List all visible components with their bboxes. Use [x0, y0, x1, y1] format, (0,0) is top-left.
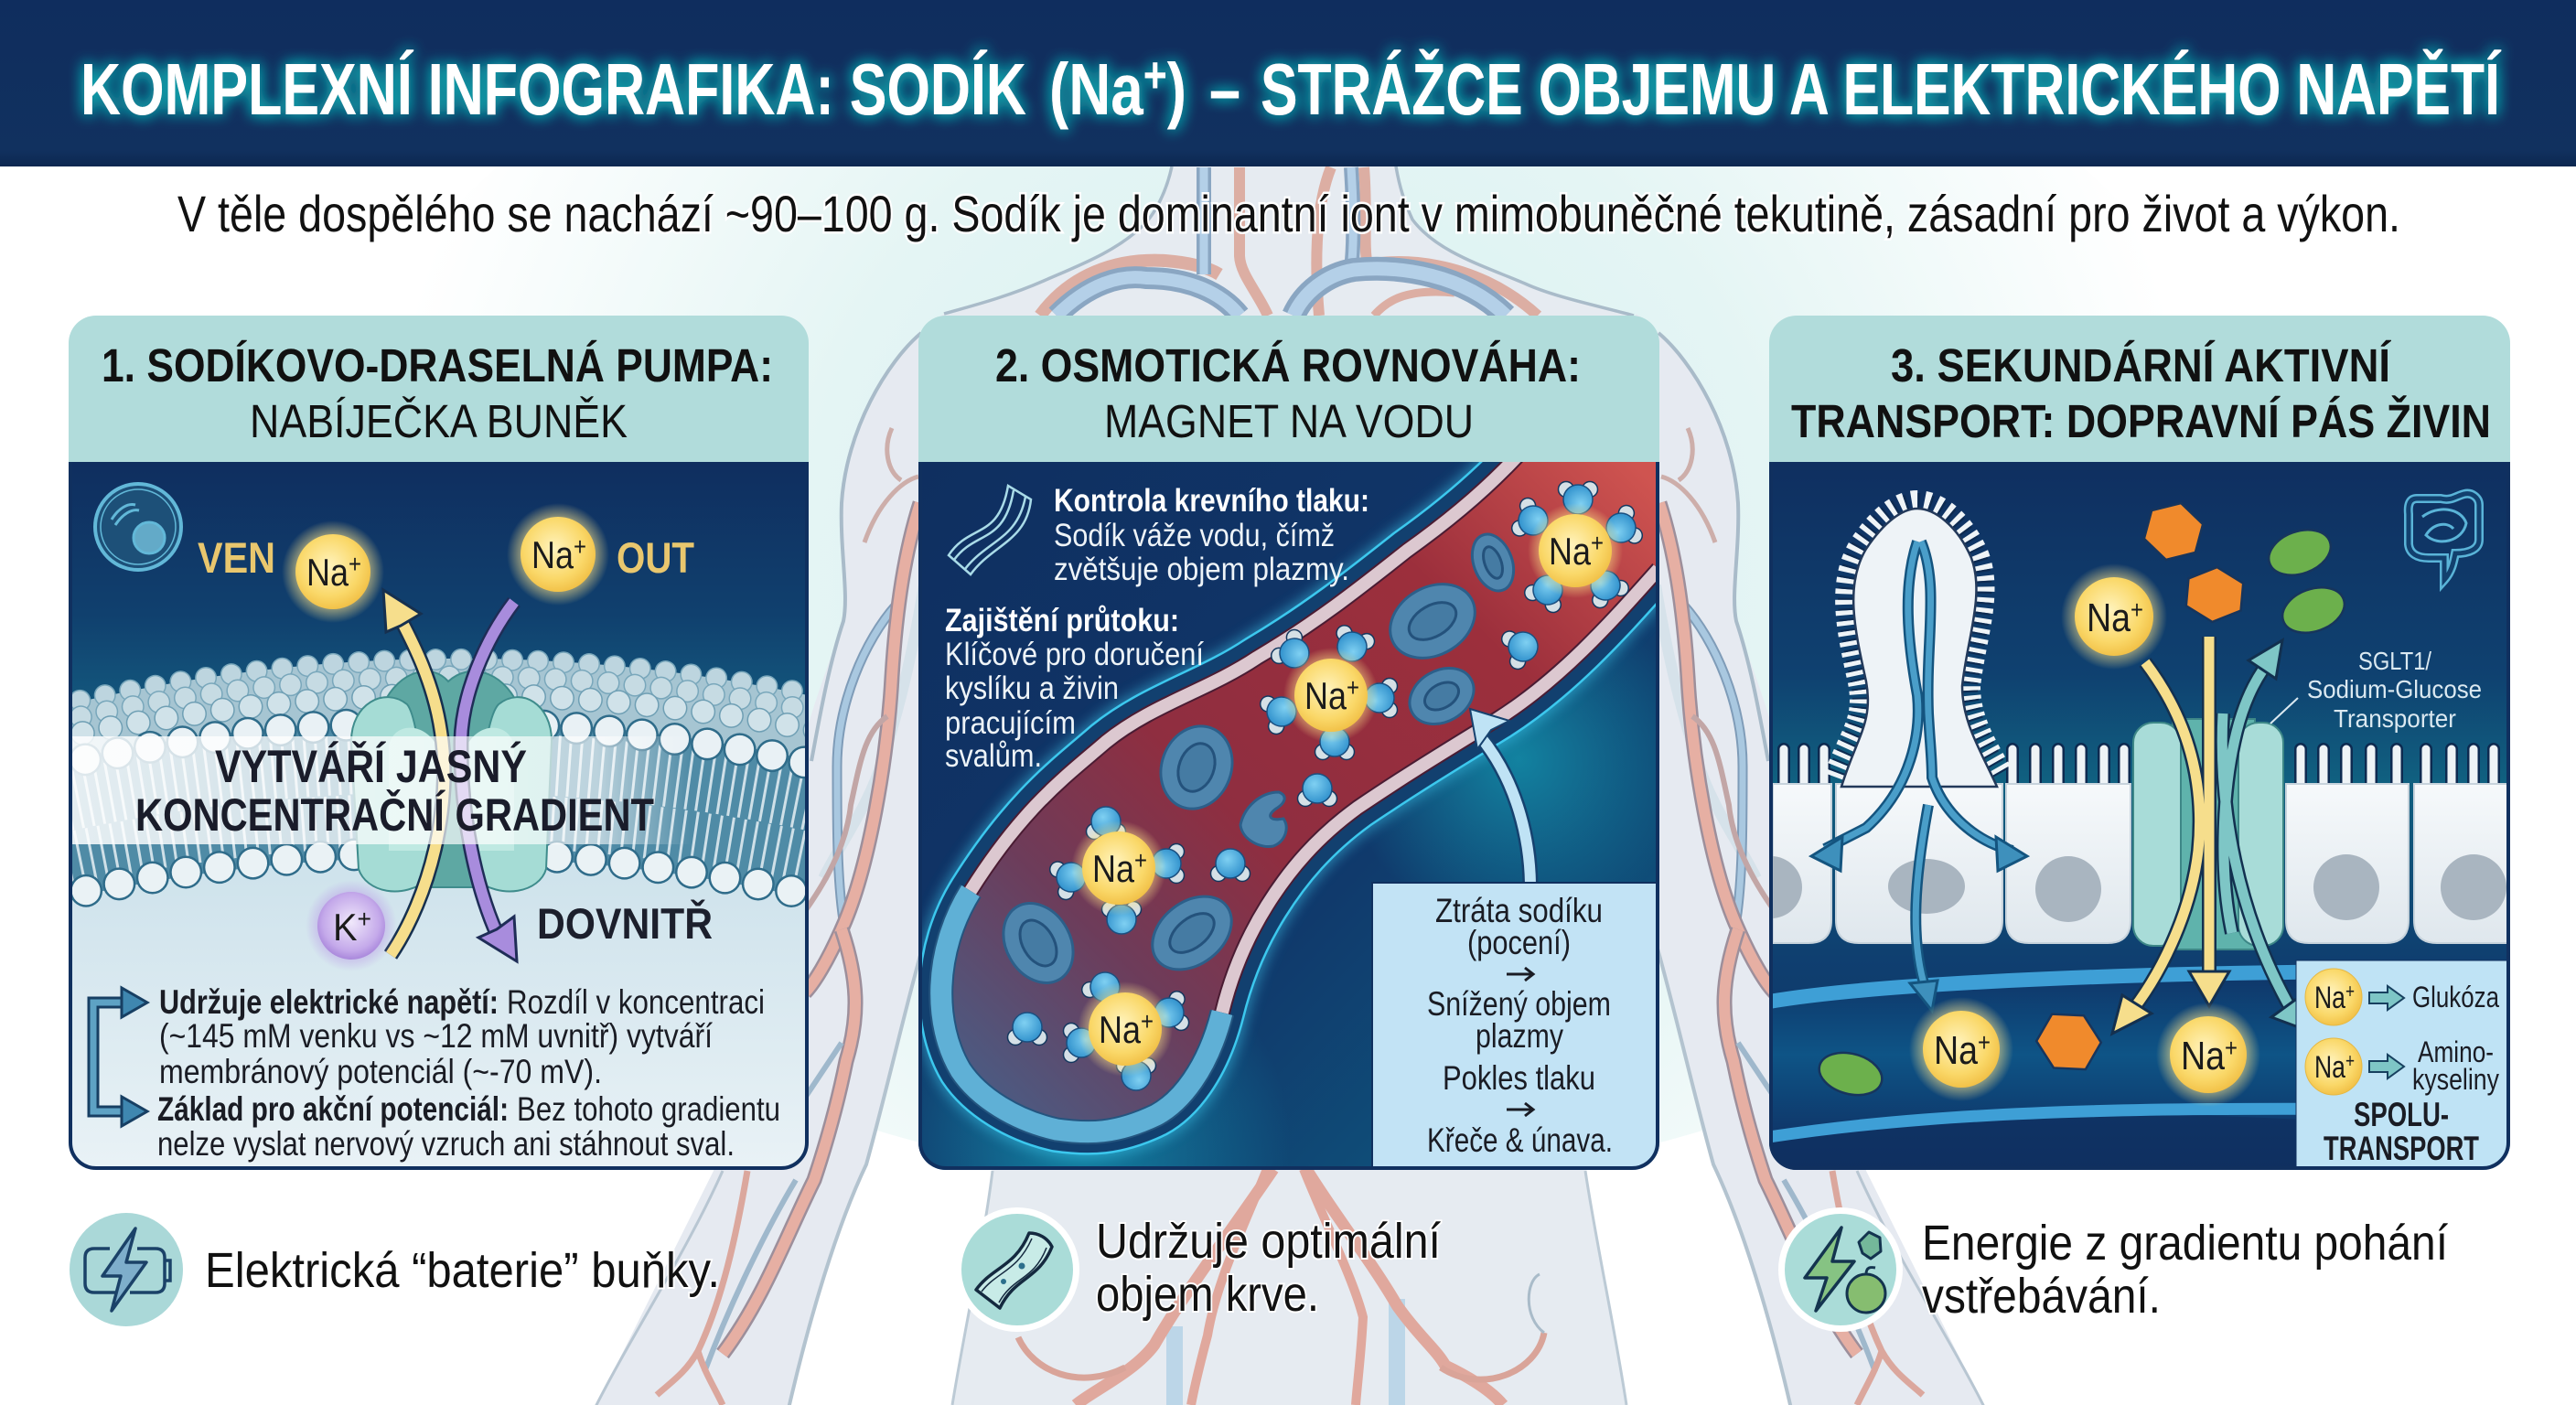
transporter label: SGLT1/	[2358, 647, 2431, 675]
sodium ions panel 3: +	[2131, 595, 2143, 624]
legend: co-transport: kyseliny	[2412, 1063, 2499, 1096]
blood stream	[1773, 964, 2296, 1142]
legend: co-transport	[2296, 960, 2516, 1175]
villus	[1841, 509, 1997, 787]
panel 3 heading: TRANSPORT: DOPRAVNÍ PÁS ŽIVIN	[1791, 394, 2491, 447]
sodium ions in vessel: Na	[1092, 847, 1142, 890]
panel 1 body text: Základ pro akční potenciál:	[157, 1090, 509, 1128]
gradient label band	[69, 736, 691, 844]
transporter label: Transporter	[2334, 704, 2456, 733]
panel 1 body text: membránový potenciál (~-70 mV).	[159, 1053, 602, 1090]
label DOVNITŘ: DOVNITŘ	[537, 899, 713, 948]
panel 1 heading: 1. SODÍKOVO-DRASELNÁ PUMPA:	[102, 339, 773, 391]
sodium ions in vessel: Na	[1099, 1008, 1148, 1051]
panel 3 background	[1769, 462, 2510, 1170]
icon: battery with bolt	[70, 1213, 183, 1326]
transporter label	[2270, 647, 2482, 733]
potassium ion	[306, 880, 397, 971]
panel 1 body text	[157, 983, 780, 1163]
epithelial cells	[1773, 784, 2512, 943]
title banner	[0, 0, 2576, 166]
gradient label band: KONCENTRAČNÍ GRADIENT	[135, 788, 654, 841]
panel 1 heading	[69, 316, 809, 462]
takeaway 2 text: Udržuje optimální	[1096, 1214, 1441, 1269]
arrow from callout to vessel	[1470, 709, 1530, 884]
takeaway 2 text: objem krve.	[1096, 1267, 1319, 1322]
takeaway 2 text	[1096, 1214, 1441, 1322]
lower cytoplasm area	[69, 857, 808, 1170]
flow text: svalům.	[945, 738, 1042, 774]
cell membrane	[53, 659, 823, 915]
legend: co-transport: SPOLU-	[2354, 1096, 2449, 1133]
sodium ions panel 3: +	[2225, 1034, 2238, 1062]
lower torso vessels	[952, 1169, 1626, 1405]
pump protein	[351, 671, 552, 891]
panel 1 body text: nelze vyslat nervový vzruch ani stáhnout sval.	[157, 1125, 735, 1163]
villus vessels and arrows	[1811, 542, 2027, 1011]
panel 1 body text: Udržuje elektrické napětí:	[159, 983, 499, 1021]
takeaway 3 text: Energie z gradientu pohání	[1922, 1216, 2448, 1271]
flow text: pracujícím	[945, 705, 1076, 741]
left and right arm	[595, 314, 1985, 1405]
sodium ion right	[507, 503, 609, 606]
background glow behind the body	[302, 0, 2278, 1189]
title: )	[1167, 48, 1186, 130]
sodium ions in vessel: Na	[1549, 530, 1598, 573]
panel 1 heading: NABÍJEČKA BUNĚK	[250, 395, 628, 447]
blood pressure text	[1054, 483, 1369, 587]
bracket arrow	[93, 988, 147, 1126]
panel: 1 sodium-potassium pump	[53, 316, 823, 1170]
callout: sodium loss chain: Pokles tlaku	[1443, 1059, 1595, 1097]
sodium ion right: Na	[531, 533, 581, 576]
legend: co-transport: +	[2345, 1049, 2355, 1072]
icon: cell	[95, 484, 181, 570]
title	[80, 46, 2501, 130]
sodium ions in vessel: +	[1141, 1007, 1154, 1035]
lower membrane heads	[53, 853, 823, 898]
panel 2 heading	[918, 316, 1659, 462]
sodium ions panel 3: Na	[1934, 1028, 1985, 1073]
sodium ions panel 3: Na	[2181, 1034, 2232, 1078]
panel: 2 osmotic balance	[918, 316, 1683, 1175]
panel 2 background	[918, 462, 1659, 1170]
panel 1 background	[72, 462, 805, 699]
icon: intestine	[2409, 494, 2479, 580]
transporter label: Sodium-Glucose	[2307, 675, 2482, 703]
sodium ions panel 3: +	[1978, 1028, 1991, 1056]
callout: sodium loss chain: Ztráta sodíku	[1435, 892, 1603, 929]
takeaway 3: absorption energy	[1778, 1207, 2448, 1332]
takeaway 2: blood volume	[955, 1207, 1441, 1332]
neck and chest vessels	[944, 166, 1634, 316]
legend: co-transport: Na	[2314, 1050, 2354, 1085]
callout: sodium loss chain: Křeče & únava.	[1427, 1121, 1613, 1159]
sodium ions in vessel: +	[1134, 846, 1147, 874]
sodium ions in vessel	[1071, 503, 1623, 1077]
label VEN: VEN	[198, 533, 275, 582]
cell nuclei	[1740, 854, 2506, 922]
blood pressure text: Sodík váže vodu, čímž	[1054, 518, 1335, 553]
yellow arrows	[2112, 637, 2229, 1034]
blood pressure text: Kontrola krevního tlaku:	[1054, 483, 1369, 519]
title: (Na	[1049, 48, 1167, 130]
panel 1 body text: Bez tohoto gradientu	[517, 1090, 780, 1128]
sodium ions in vessel: Na	[1304, 674, 1354, 717]
potassium ion: +	[358, 905, 371, 933]
legend: co-transport: Na	[2314, 981, 2354, 1015]
sodium ion left: Na	[306, 551, 356, 594]
flow text: Klíčové pro doručení	[945, 637, 1204, 672]
panel 3 frame	[1771, 462, 2508, 1168]
icon: bolt with food	[1778, 1207, 1903, 1332]
sodium ions panel 3: Na	[2087, 595, 2138, 640]
blood pressure text: zvětšuje objem plazmy.	[1054, 552, 1349, 587]
callout: sodium loss chain: (pocení)	[1467, 924, 1571, 961]
takeaway 1 text: Elektrická “baterie” buňky.	[205, 1243, 720, 1298]
title: +	[1143, 46, 1167, 103]
callout: sodium loss chain	[1372, 883, 1665, 1175]
callout: sodium loss chain: Snížený objem	[1427, 985, 1611, 1023]
icon: vessel tube	[955, 1207, 1079, 1332]
takeaway 1: battery	[70, 1213, 720, 1326]
purple arrow in	[461, 602, 517, 961]
panel 2 heading: 2. OSMOTICKÁ ROVNOVÁHA:	[995, 339, 1581, 391]
background human body silhouette with vessels	[595, 166, 1985, 1405]
legend: co-transport: Glukóza	[2412, 981, 2499, 1014]
yellow arrow out	[383, 590, 444, 955]
potassium ion: K	[333, 906, 359, 949]
takeaway 3 text: vstřebávání.	[1922, 1269, 2161, 1324]
flow text	[945, 603, 1204, 774]
water molecules	[1008, 481, 1645, 1090]
sodium ion left	[282, 520, 384, 623]
panel 1 body text: Rozdíl v koncentraci	[507, 983, 765, 1021]
legend: co-transport: +	[2345, 980, 2355, 1003]
panel 3 heading: 3. SEKUNDÁRNÍ AKTIVNÍ	[1891, 339, 2392, 391]
torso and shoulders	[918, 166, 1659, 1405]
sodium ions in vessel: +	[1347, 673, 1359, 702]
panel 1 body text: (~145 mM venku vs ~12 mM uvnitř) vytváří	[159, 1017, 714, 1055]
icon: vessel outline	[949, 486, 1031, 574]
flow text: Zajištění průtoku:	[945, 603, 1179, 638]
takeaway 3 text	[1922, 1216, 2448, 1324]
sodium ion left: +	[349, 550, 361, 578]
sodium ions panel 3	[1909, 563, 2260, 1107]
nutrient molecules	[1814, 497, 2351, 1101]
callout: sodium loss chain: plazmy	[1476, 1017, 1563, 1055]
panel 3 heading	[1769, 316, 2510, 462]
title: –	[1209, 48, 1240, 130]
sodium ions in vessel: +	[1591, 529, 1604, 557]
panel: 3 secondary active transport	[1740, 316, 2516, 1175]
teal arrows	[2222, 640, 2303, 1029]
gradient label band: VYTVÁŘÍ JASNÝ	[215, 741, 527, 792]
SGLT1 transporter	[2133, 719, 2283, 949]
red blood cells	[990, 529, 1521, 995]
panel 2 heading: MAGNET NA VODU	[1104, 395, 1474, 447]
flow text: kyslíku a živin	[945, 670, 1119, 706]
panel 2 frame	[920, 462, 1658, 1168]
title: KOMPLEXNÍ INFOGRAFIKA: SODÍK	[80, 48, 1026, 130]
legend: co-transport: TRANSPORT	[2324, 1130, 2479, 1167]
legend: co-transport: Amino-	[2418, 1035, 2494, 1068]
blood vessel	[941, 453, 1683, 1132]
sodium ion right: +	[574, 532, 586, 561]
label OUT: OUT	[617, 533, 694, 582]
panel 1 frame	[70, 462, 807, 1168]
microvilli	[1784, 749, 2494, 787]
